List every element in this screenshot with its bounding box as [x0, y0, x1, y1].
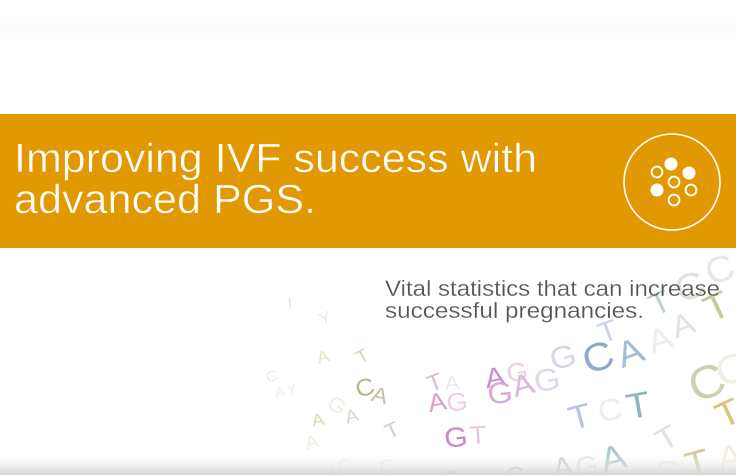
subtitle [385, 276, 720, 323]
DNA letters background: C [576, 331, 620, 383]
title: advanced PGS. [14, 176, 316, 222]
DNA letters background: A [310, 409, 326, 431]
orange title band [0, 114, 736, 248]
DNA letters background: A [273, 384, 287, 402]
DNA letters background: T [643, 283, 677, 323]
subtitle: successful pregnancies. [385, 298, 644, 323]
DNA letters background: T [469, 420, 487, 450]
DNA letters background: T [564, 396, 596, 438]
DNA letters background: G [486, 375, 514, 411]
DNA letters background: T [623, 383, 653, 427]
DNA letters background: I [287, 294, 293, 312]
DNA letters background: T [353, 345, 374, 369]
DNA letters background: C [681, 353, 733, 413]
DNA letters background [264, 246, 736, 475]
DNA letters background: T [423, 368, 447, 398]
DNA letters background: G [323, 390, 351, 420]
DNA letters background: T [697, 283, 736, 331]
DNA letters background: A [508, 366, 538, 404]
DNA letters background: A [642, 318, 678, 362]
DNA letters background: G [531, 361, 563, 399]
DNA letters background: C [264, 368, 280, 386]
DNA letters background: C [595, 391, 625, 429]
icon: embryo cells in circle [624, 134, 720, 230]
subtitle: Vital statistics that can increase [385, 276, 720, 301]
DNA letters background: G [445, 387, 469, 417]
DNA letters background: Y [316, 307, 334, 329]
title: Improving IVF success with [14, 135, 537, 181]
DNA letters background: T [381, 416, 403, 444]
title [14, 135, 537, 222]
DNA letters background: C [352, 373, 378, 403]
DNA letters background: T [649, 418, 685, 458]
DNA letters background: A [482, 361, 508, 395]
DNA letters background: A [314, 346, 332, 368]
DNA letters background: A [611, 329, 649, 375]
DNA letters background: G [443, 422, 469, 454]
DNA letters background: A [425, 386, 449, 418]
DNA letters background: C [669, 263, 711, 311]
DNA letters background: G [546, 337, 580, 377]
DNA letters background: T [594, 314, 622, 350]
DNA letters background: A [443, 370, 461, 396]
DNA letters background: A [369, 381, 392, 409]
DNA letters background: G [504, 356, 530, 388]
DNA letters background: A [343, 406, 361, 428]
DNA letters background: Y [286, 382, 299, 398]
DNA letters background: A [667, 305, 700, 345]
DNA letters background: A [303, 432, 321, 454]
